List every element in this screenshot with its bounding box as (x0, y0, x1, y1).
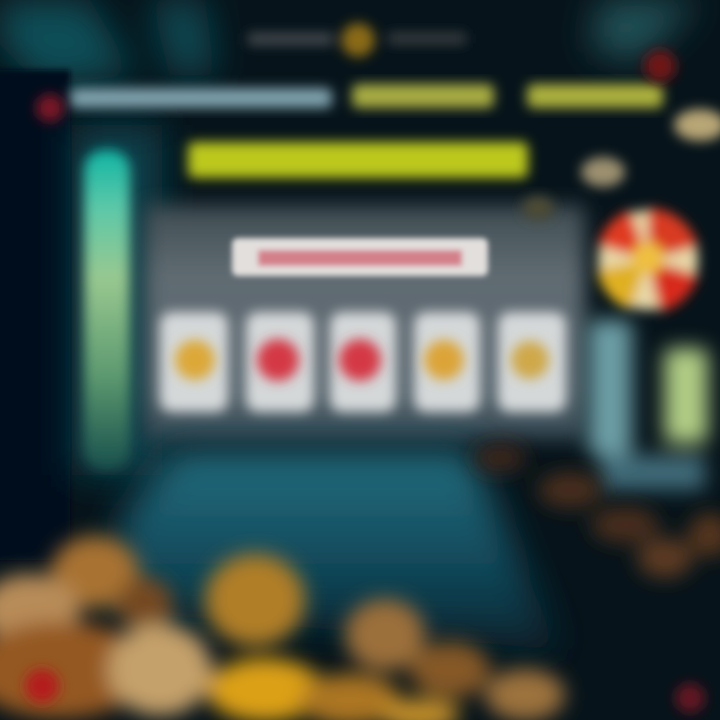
logo at top (248, 23, 466, 57)
right row of brown coins (474, 444, 720, 578)
left dark pillar (0, 70, 70, 560)
coin pile (0, 536, 565, 720)
heading line 1 (70, 84, 663, 108)
banner (232, 238, 488, 276)
top ceiling streaks (0, 0, 700, 85)
red gem in pile (25, 669, 59, 703)
slot reels (160, 312, 566, 412)
prize wheel (597, 208, 698, 312)
floor (110, 450, 560, 650)
red accent top left (36, 94, 64, 122)
right slot machines (588, 320, 708, 490)
floating coins upper right (522, 109, 720, 220)
glowing left strip (84, 150, 130, 470)
reel symbols (175, 339, 549, 381)
teal side wall (72, 125, 162, 475)
center wall (145, 205, 585, 440)
heading line 2 (188, 142, 528, 178)
red gem bottom right (675, 683, 705, 713)
red accent top right (644, 50, 676, 82)
